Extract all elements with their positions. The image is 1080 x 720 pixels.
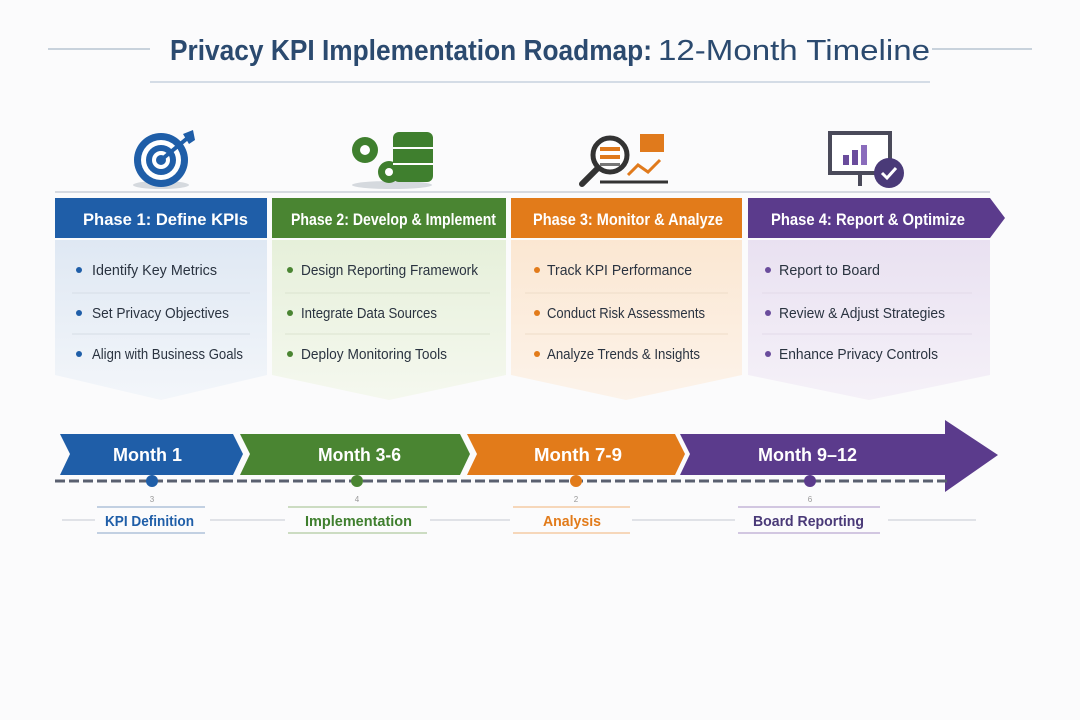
panel: phase 4: Enhance Privacy Controls	[779, 346, 938, 363]
timeline arrow: Month 1	[113, 445, 182, 465]
timeline arrow: Month 7-9	[534, 445, 622, 465]
dashed timeline with milestones: 2	[574, 495, 579, 504]
panel: phase 3	[511, 198, 742, 400]
dashed timeline with milestones: 3	[150, 495, 155, 504]
dashed timeline with milestones: 4	[355, 495, 360, 504]
panel: phase 1: Align with Business Goals	[92, 346, 243, 363]
milestone labels	[62, 507, 976, 533]
panel: phase 4: Report to Board	[779, 262, 880, 279]
panel: phase 1: Set Privacy Objectives	[92, 305, 229, 322]
panel: phase 2: Phase 2: Develop & Implement	[291, 210, 496, 229]
panel: phase 2: Deploy Monitoring Tools	[301, 346, 447, 363]
panel: phase 3: Conduct Risk Assessments	[547, 305, 705, 322]
panel: phase 2: Integrate Data Sources	[301, 305, 437, 322]
panel: phase 2	[272, 198, 506, 400]
panel: phase 3: Track KPI Performance	[547, 262, 692, 279]
panel: phase 2: Design Reporting Framework	[301, 262, 478, 279]
panel: phase 3: Phase 3: Monitor & Analyze	[533, 210, 723, 229]
title: Privacy KPI Implementation Roadmap:	[170, 35, 652, 67]
milestone labels: Analysis	[543, 513, 601, 530]
panel: phase 3: Analyze Trends & Insights	[547, 346, 700, 363]
icon: presentation board	[830, 133, 904, 188]
milestone labels: Board Reporting	[753, 513, 864, 530]
panel: phase 4	[748, 198, 1005, 400]
icon: magnifier with chart	[582, 134, 668, 184]
dashed timeline with milestones: 6	[808, 495, 813, 504]
timeline arrow	[60, 420, 998, 492]
panel: phase 4: Phase 4: Report & Optimize	[771, 210, 965, 229]
icon: target	[133, 130, 195, 189]
title	[48, 35, 1032, 82]
milestone labels: KPI Definition	[105, 513, 194, 530]
timeline arrow: Month 9–12	[758, 445, 857, 465]
timeline arrow: Month 3-6	[318, 445, 401, 465]
icon: gears and database	[352, 132, 433, 189]
panel: phase 1	[55, 198, 267, 400]
panel: phase 4: Review & Adjust Strategies	[779, 305, 945, 322]
panel: phase 1: Phase 1: Define KPIs	[83, 210, 248, 229]
milestone labels: Implementation	[305, 513, 412, 530]
title: 12-Month Timeline	[658, 35, 930, 67]
dashed timeline with milestones	[55, 475, 950, 504]
panel: phase 1: Identify Key Metrics	[92, 262, 217, 279]
